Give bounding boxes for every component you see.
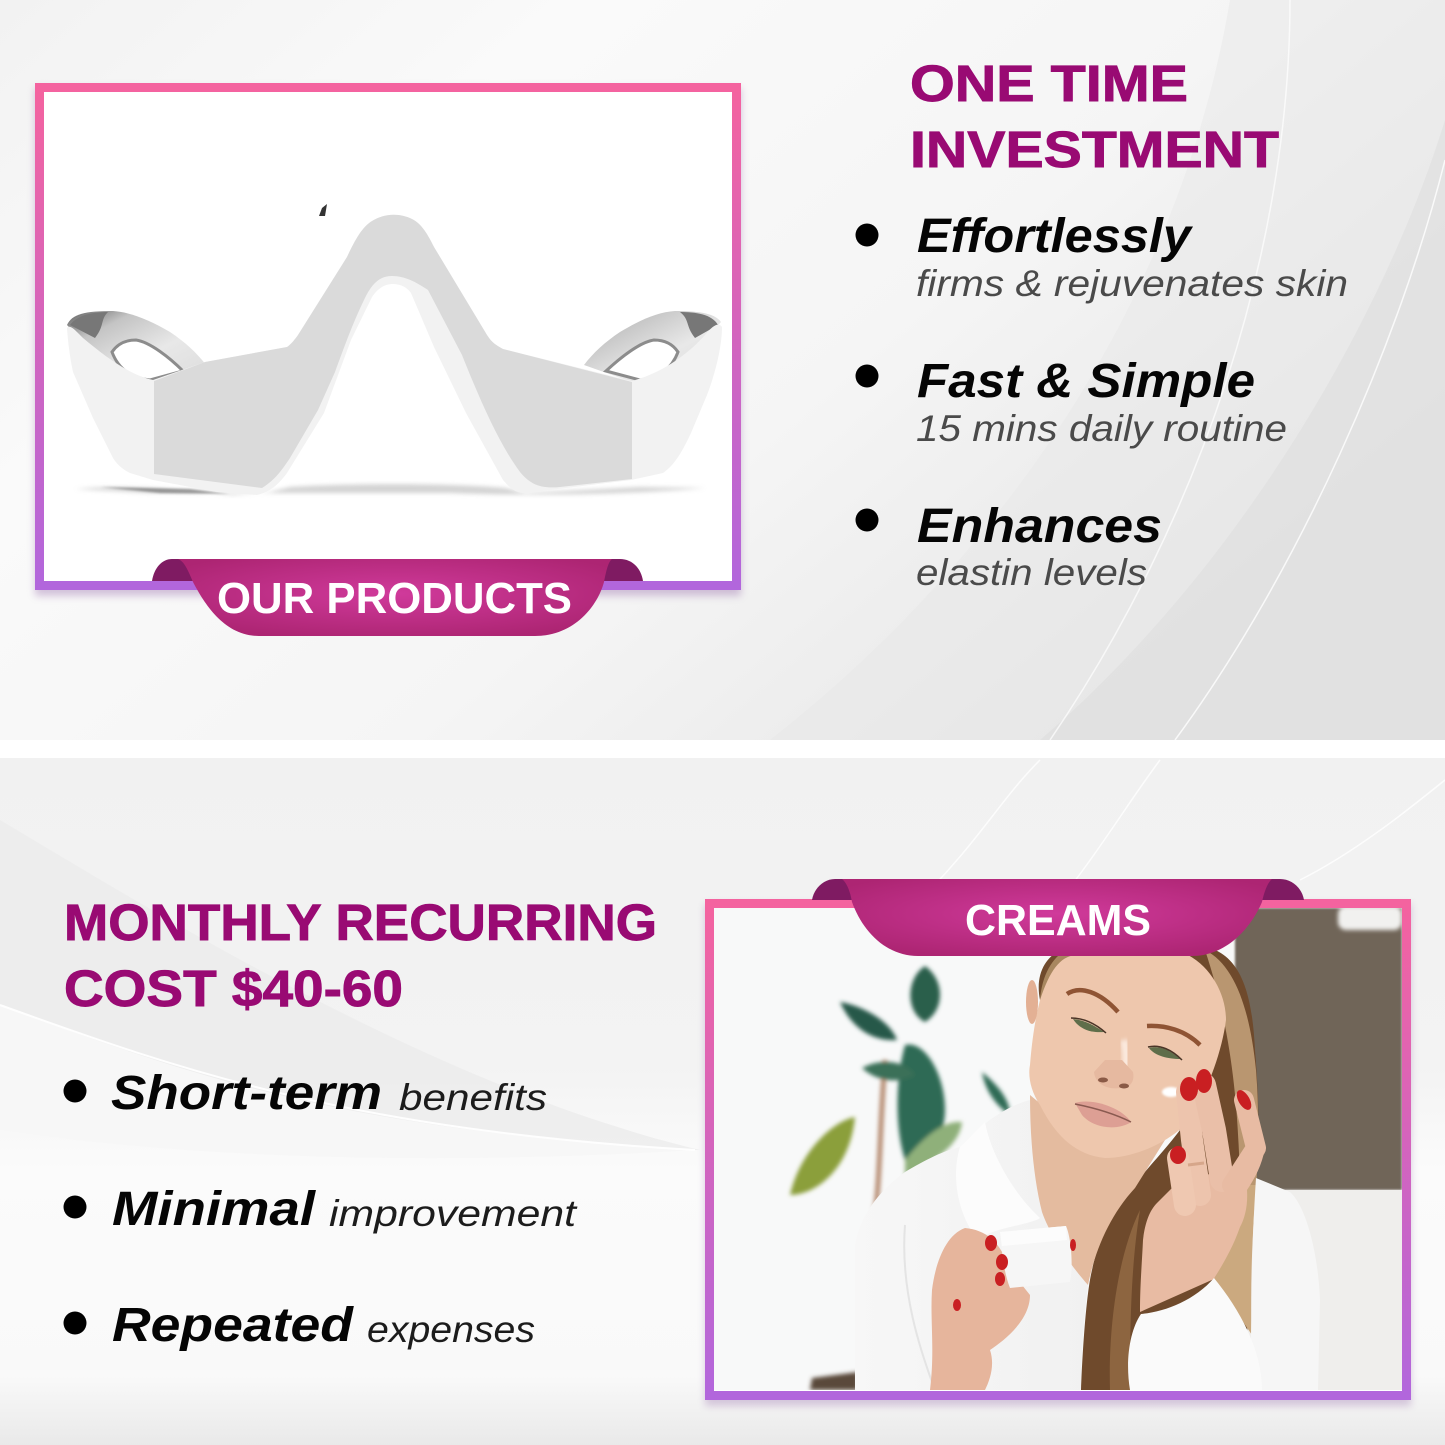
- body light shell: [67, 215, 722, 495]
- frame: creams: [710, 904, 1406, 1396]
- label: creams: CREAMS: [965, 896, 1151, 945]
- bullet: repeated: [64, 1299, 535, 1352]
- bullet: repeated: Repeated: [112, 1299, 355, 1352]
- bullet: short-term: Short-term: [111, 1067, 382, 1120]
- ear: [1026, 980, 1038, 1024]
- bullet: repeated: expenses: [367, 1309, 535, 1350]
- face: [1029, 955, 1226, 1158]
- list: cream drawbacks: [64, 1067, 578, 1352]
- bullet: fast and simple: 15 mins daily routine: [916, 408, 1287, 449]
- heading: one time investment: ONE TIME: [910, 55, 1188, 112]
- bullet: short-term: [64, 1067, 547, 1120]
- ribbon: our products: [152, 559, 643, 636]
- bullet: effortlessly: firms & rejuvenates skin: [916, 263, 1348, 304]
- bullet: enhances: elastin levels: [916, 552, 1147, 593]
- heading: monthly recurring cost: [64, 894, 657, 1017]
- bullet: short-term: benefits: [399, 1077, 547, 1118]
- frame: products: [40, 88, 736, 586]
- right hand: [1140, 1069, 1265, 1312]
- robe: [855, 1100, 1320, 1390]
- bullet: fast and simple: [856, 355, 1287, 449]
- nose and lips: [1075, 1060, 1133, 1127]
- plant: [790, 966, 1010, 1215]
- right sleeve: [1128, 1278, 1262, 1390]
- panel: creams: [705, 879, 1411, 1406]
- heading: one time investment: INVESTMENT: [910, 121, 1279, 178]
- cream dab: [1162, 1087, 1180, 1097]
- bullet: effortlessly: Effortlessly: [917, 210, 1193, 263]
- bullet: enhances: [856, 500, 1162, 593]
- bullet: effortlessly: [856, 210, 1348, 304]
- silver eye opening right: [584, 311, 721, 382]
- jar and left hand: [930, 1226, 1076, 1390]
- label: our products: OUR PRODUCTS: [217, 574, 572, 623]
- bullet: minimal: [64, 1183, 578, 1236]
- bottom background panel: [0, 758, 1445, 1445]
- icon: device: [67, 204, 722, 495]
- panel: our products: [35, 88, 741, 636]
- ribbon: creams: [812, 879, 1304, 956]
- neck: [1030, 1095, 1165, 1285]
- bullet: enhances: Enhances: [917, 500, 1162, 553]
- top background panel: [0, 0, 1445, 740]
- heading: monthly recurring cost: COST $40-60: [64, 960, 403, 1017]
- bullet: minimal: improvement: [329, 1193, 578, 1234]
- hair: [1039, 945, 1258, 1390]
- heading: monthly recurring cost: MONTHLY RECURRING: [64, 894, 657, 951]
- silver eye opening left: [67, 311, 206, 382]
- heading: one time investment: [910, 55, 1279, 178]
- gray front panel: [154, 215, 632, 488]
- eyebrows and eyes: [1067, 990, 1200, 1060]
- bullet: minimal: Minimal: [112, 1183, 317, 1236]
- photo: woman applying cream: [786, 908, 1402, 1390]
- list: product benefits: [856, 210, 1348, 593]
- bullet: fast and simple: Fast & Simple: [917, 355, 1255, 408]
